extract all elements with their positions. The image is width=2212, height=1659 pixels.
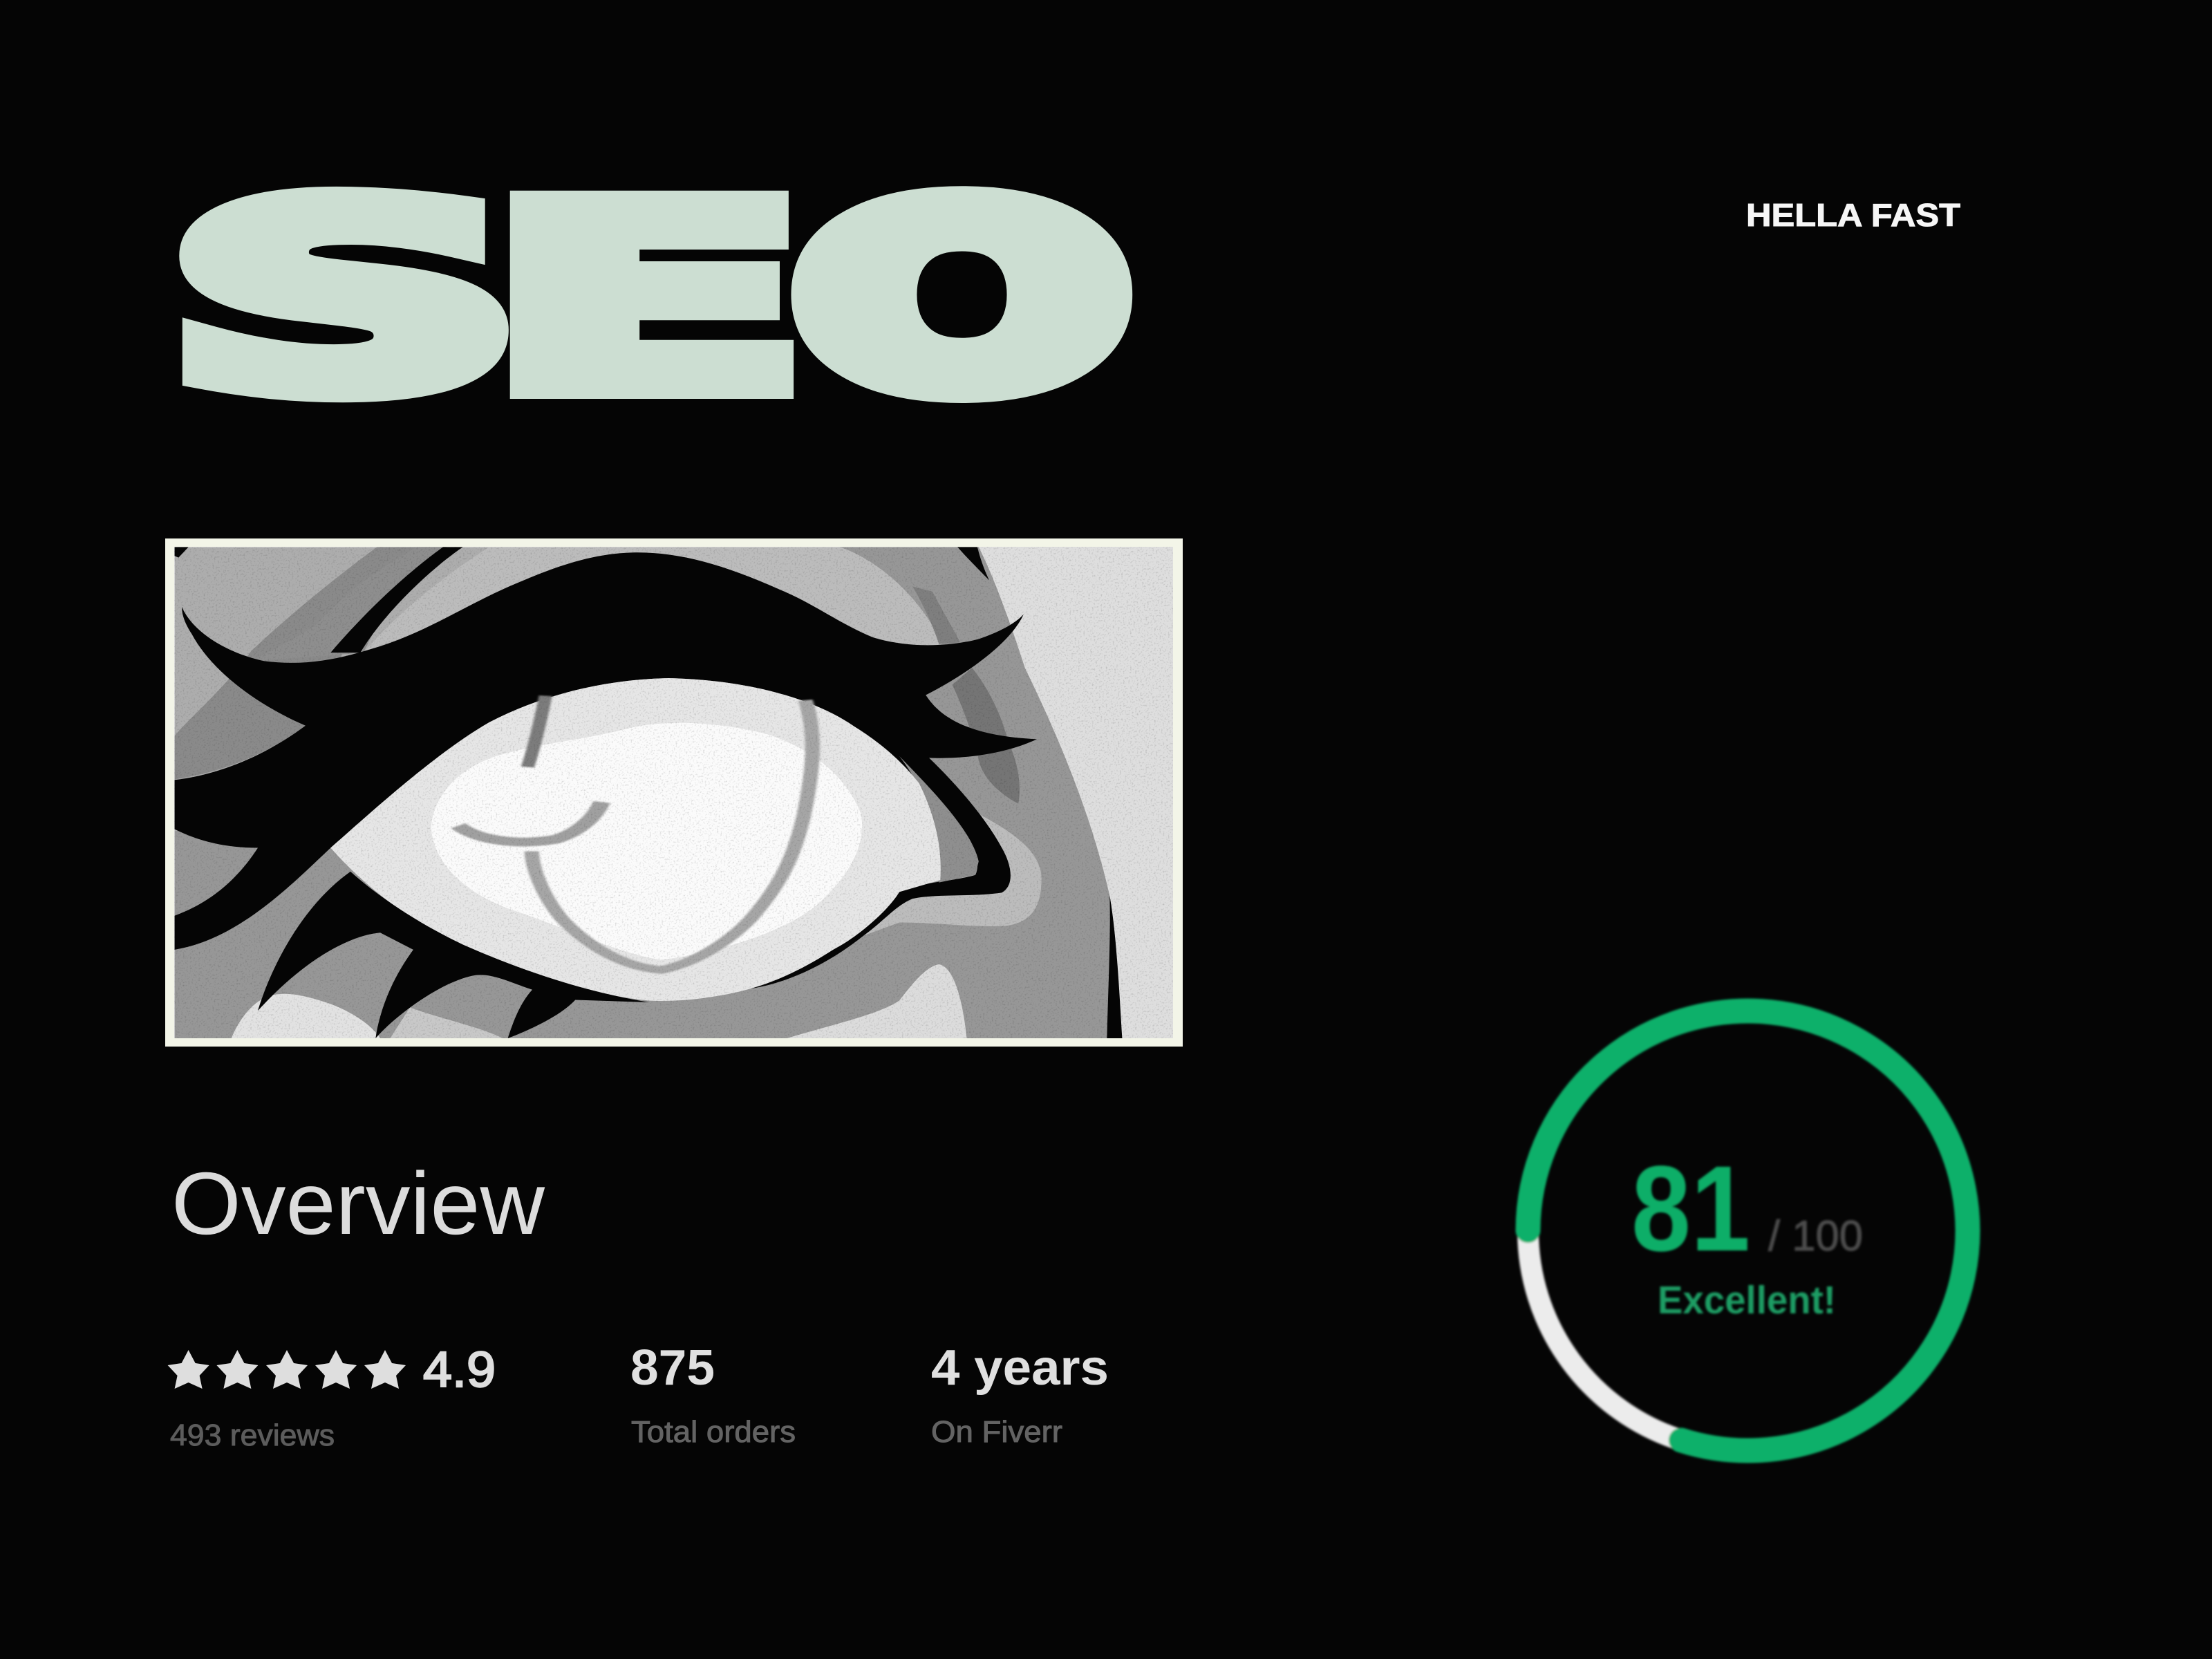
score maximum: / 100 bbox=[1768, 1212, 1863, 1260]
gauge: score 81 of 100 bbox=[1528, 1011, 1967, 1450]
orders value: 875 bbox=[630, 1340, 715, 1396]
eye illustration bbox=[174, 547, 1173, 1038]
orders label: Total orders bbox=[631, 1415, 796, 1449]
stat: years on Fiverr bbox=[931, 1340, 1109, 1449]
image frame bbox=[165, 538, 1183, 1047]
gauge remainder arc bbox=[1528, 1230, 1681, 1441]
title: SEO: O bbox=[797, 157, 1127, 442]
review count: 493 reviews bbox=[170, 1418, 335, 1452]
title: SEO: E bbox=[488, 151, 807, 448]
score verdict: Excellent! bbox=[1658, 1278, 1836, 1322]
stat: rating bbox=[168, 1342, 496, 1452]
image panel: stylised eye illustration bbox=[165, 538, 1183, 1047]
gauge score arc bbox=[1528, 1011, 1967, 1450]
score value: 81 bbox=[1631, 1141, 1750, 1277]
title: SEO: S bbox=[167, 151, 522, 447]
heading: Overview: Overview bbox=[171, 1154, 545, 1253]
film grain texture bbox=[174, 547, 1173, 1038]
icon: five stars bbox=[168, 1350, 406, 1389]
years label: On Fiverr bbox=[931, 1415, 1062, 1449]
stat: total orders bbox=[630, 1340, 796, 1449]
title: SEO bbox=[167, 151, 1127, 448]
years value: 4 years bbox=[931, 1340, 1109, 1396]
tagline: HELLA FAST: HELLA FAST bbox=[1746, 197, 1960, 233]
rating value: 4.9 bbox=[423, 1342, 496, 1398]
